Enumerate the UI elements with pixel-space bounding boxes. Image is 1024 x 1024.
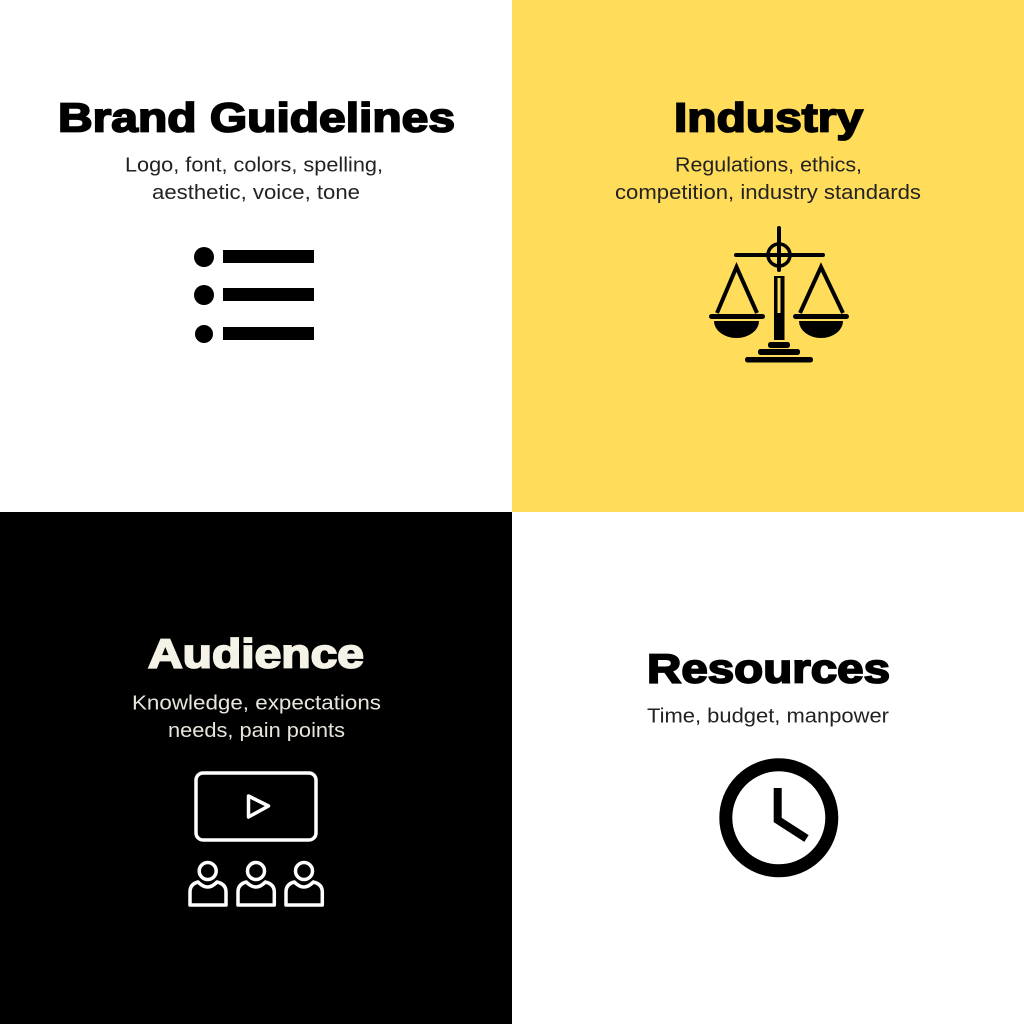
icon: bulleted list <box>194 247 314 343</box>
text: industry details: Regulations, ethics, <box>675 154 862 176</box>
text: brand guidelines details: aesthetic, voice, tone <box>152 181 360 204</box>
icon: video presentation with audience <box>190 773 322 905</box>
heading: brand guidelines: Brand Guidelines <box>58 94 455 140</box>
icon: clock <box>726 765 832 871</box>
panel: resources <box>512 512 1024 1024</box>
text: industry details <box>615 154 921 204</box>
text: resources details: Time, budget, manpower <box>647 704 889 728</box>
panel: audience <box>0 512 512 1024</box>
text: audience details <box>132 692 381 742</box>
text: industry details: competition, industry standards <box>615 181 921 204</box>
panel: industry <box>512 0 1024 512</box>
panel: brand guidelines <box>0 0 512 512</box>
text: audience details: needs, pain points <box>168 719 345 742</box>
text: audience details: Knowledge, expectations <box>132 692 381 714</box>
text: brand guidelines details: Logo, font, colors, spelling, <box>125 154 383 176</box>
heading: audience: Audience <box>148 630 364 676</box>
heading: industry: Industry <box>674 94 863 140</box>
text: brand guidelines details <box>125 154 383 204</box>
heading: resources: Resources <box>647 646 890 692</box>
icon: balance scales <box>709 228 849 362</box>
